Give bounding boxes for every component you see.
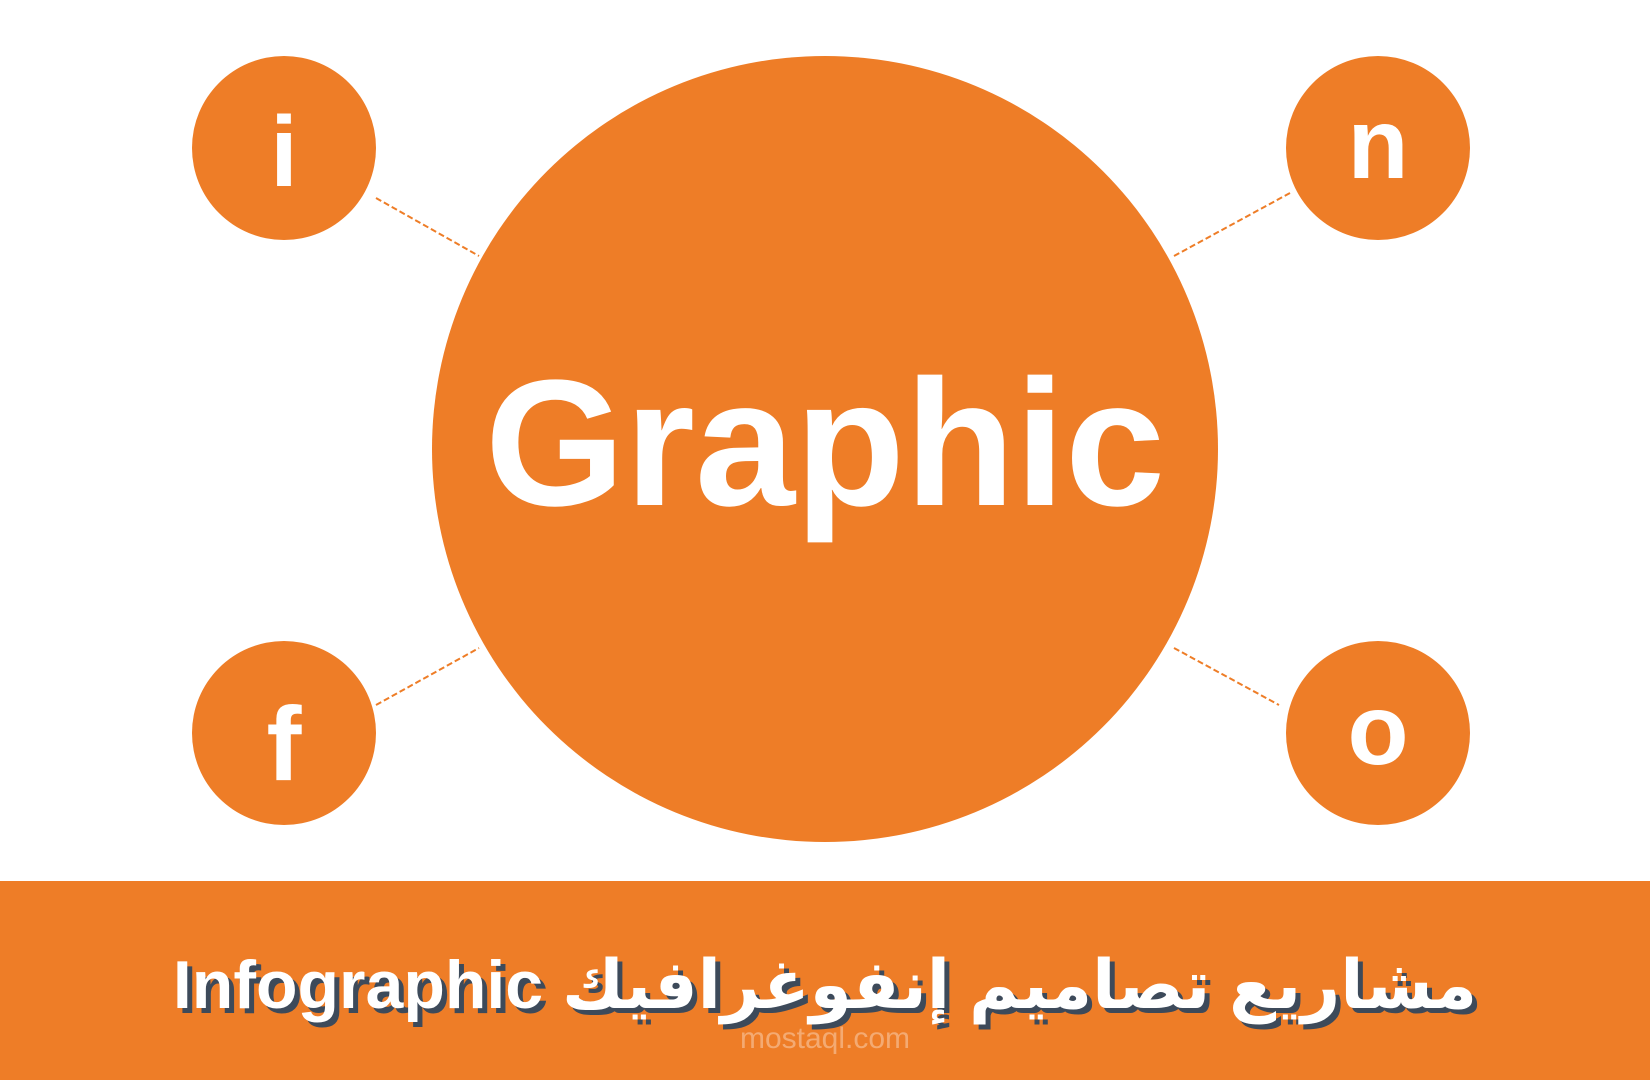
connector: top-left	[376, 198, 479, 256]
circle: n: n	[1347, 88, 1409, 200]
circle: i	[192, 56, 376, 240]
watermark: mostaql.com	[740, 1022, 910, 1055]
circle: f: f	[267, 686, 303, 803]
connector: bottom-right	[1174, 648, 1279, 705]
connector: top-right	[1174, 193, 1290, 256]
circle: i: i	[270, 96, 298, 208]
circle: f	[192, 641, 376, 825]
banner title: مشاريع تصاميم إنفوغرافيك Infographic	[173, 947, 1477, 1023]
connector: bottom-left	[376, 648, 479, 705]
central circle: Graphic: Graphic	[485, 343, 1165, 544]
circle: n	[1286, 56, 1470, 240]
circle: o: o	[1347, 674, 1409, 786]
bottom banner	[0, 881, 1650, 1080]
circle: o	[1286, 641, 1470, 825]
